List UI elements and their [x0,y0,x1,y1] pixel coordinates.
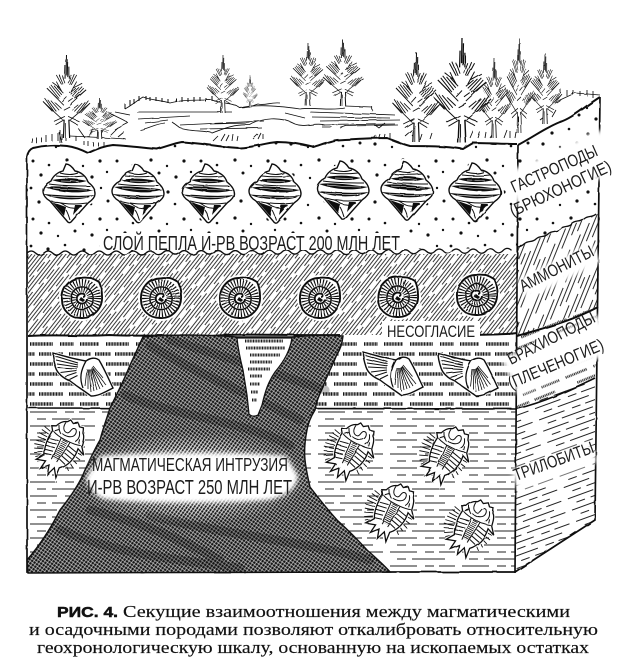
trilobite fossil [314,412,386,488]
trilobite fossil [354,473,426,549]
ash dot texture [27,138,517,253]
tree [504,38,534,133]
gastropod fossil [43,164,95,223]
side face: brachiopod layer [516,307,598,409]
landscape: horizon, water and ground lines [32,88,600,146]
label: trilobites: ТРИЛОБИТЫ [511,438,596,485]
illustration: geological block [24,38,600,573]
label: intrusion line 1: МАГМАТИЧЕСКАЯ ИНТРУЗИЯ [92,455,288,475]
tree [433,38,491,143]
side face: ammonite layer [517,213,600,336]
trilobite fossil [434,489,506,565]
layer: brachiopod dashes, front [28,338,518,408]
ammonite fossil [454,272,500,318]
tree [290,43,326,106]
tree [392,52,440,142]
caption line 1: Секущие взаимоотношения между магматическими [123,602,570,621]
label: brachiopods: БРАХИОПОДЫ [504,308,598,369]
tree [43,55,90,138]
gastropod fossil [449,163,501,222]
ammonite fossil [59,275,105,321]
gastropod fossil [112,164,164,223]
gastropod fossil [317,161,369,220]
layer: trilobite dashes, front [28,409,516,572]
label: ash layer: СЛОЙ ПЕПЛА И-РВ ВОЗРАСТ 200 МЛН ЛЕТ [103,231,400,255]
layer: ammonite hatching, front [28,254,518,335]
caption [29,602,598,657]
gastropod fossil [182,164,234,223]
ammonite fossil [138,275,184,321]
label: ammonites: АММОНИТЫ [516,242,597,296]
fossils group [24,161,506,565]
label: brachiopods alternate name: (ПЛЕЧЕНОГИЕ) [505,335,606,393]
side face: background [515,97,600,573]
caption line 3: геохронологическую шкалу, основанную на ископаемых остатках [37,638,590,657]
gastropod fossil [381,162,433,221]
label halo: trilobites [511,441,597,491]
label halo: intrusion [86,453,298,503]
trilobite fossil [24,409,96,485]
landscape and trees [32,38,600,146]
tree [207,55,239,113]
label halo: gastropods [504,128,620,215]
side face: trilobite layer [515,378,595,573]
ammonite fossil [297,275,343,321]
brachiopod fossil [53,353,113,396]
label: unconformity: НЕСОГЛАСИЕ [387,322,475,341]
magmatic intrusion [27,335,390,573]
label halo: ammonites [517,243,601,299]
sill wedge of brachiopod rock [237,338,292,416]
layer: ash background, front [27,138,517,253]
caption figure number: РИС. 4. [57,604,118,621]
label: intrusion line 2: И-РВ ВОЗРАСТ 250 МЛН ЛЕТ [87,477,292,499]
intrusion lighter fade around the label [86,434,310,522]
trilobite fossil [409,416,481,492]
caption line 2: и осадочными породами позволяют откалибровать относительную [29,620,598,639]
sill dashes [245,341,285,400]
label halo: unconformity [382,321,480,340]
block outlines and layer boundaries [27,97,600,573]
ammonite fossil [217,275,263,321]
tree [477,58,511,138]
side face: ash layer [518,97,600,247]
label halo: brachiopods [502,314,614,396]
brachiopod fossil [363,352,423,395]
intrusion shading strokes [60,340,370,568]
small tree [82,98,117,139]
small tree [243,75,257,108]
brachiopod fossil [438,353,498,396]
gastropod fossil [249,164,301,223]
label: gastropods: ГАСТРОПОДЫ [508,141,601,197]
ammonite fossil [375,274,421,320]
tree [528,53,562,124]
tree [323,40,363,106]
label halo: ash layer [100,233,404,250]
